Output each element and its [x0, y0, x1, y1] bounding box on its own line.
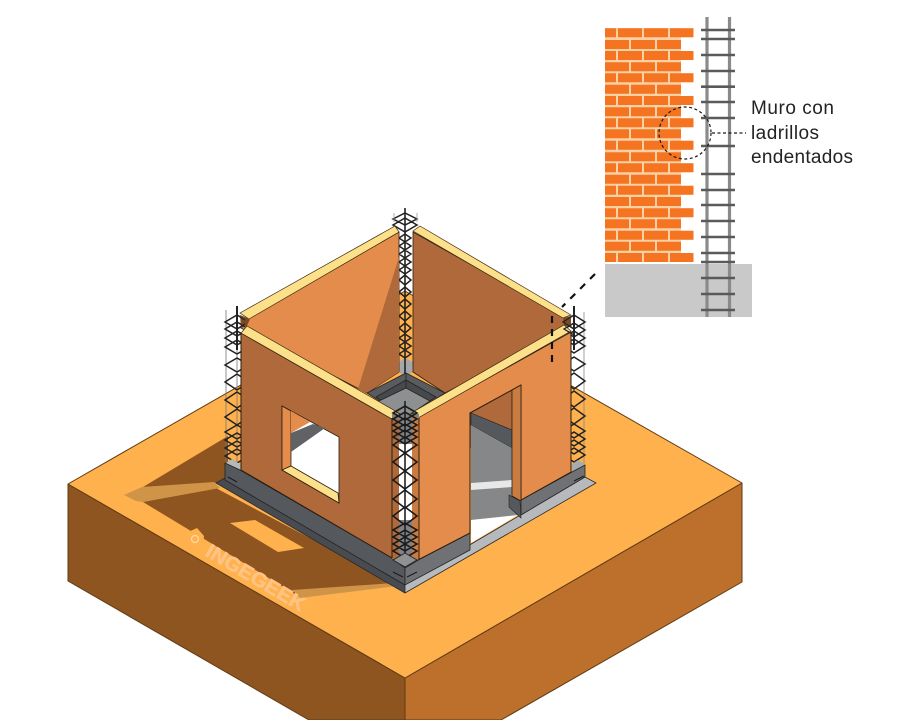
left column cap: [226, 459, 243, 471]
door opening interior: [470, 388, 518, 543]
rebar column: right: [563, 306, 585, 472]
ground top face: [68, 291, 742, 678]
gap white center: [392, 444, 419, 520]
door back wall: [470, 388, 514, 448]
window left reveal: [282, 406, 291, 470]
rebar overlay at top corners: [237, 315, 574, 335]
ground right face: [405, 483, 742, 720]
gap grey bottom: [392, 520, 419, 567]
foundation marks: [228, 476, 584, 577]
shadow lower: [143, 487, 396, 594]
callout leader dashed: [552, 274, 595, 362]
wall top: back right: [413, 226, 571, 318]
back column cap: [399, 358, 413, 376]
watermark icon: [186, 528, 204, 549]
rebar column: back: [393, 208, 417, 376]
rebar column: left: [225, 306, 249, 471]
ground left face: [68, 484, 405, 720]
left return: [392, 419, 399, 559]
foundation: front left: [225, 463, 405, 585]
window frame: [282, 406, 339, 503]
interior foundation and floor: [367, 373, 445, 418]
door light stripe: [471, 480, 512, 490]
detail panel: brick wall with rebar: [605, 17, 853, 317]
shadow upper: [143, 436, 228, 487]
detail leader line: [712, 132, 746, 134]
sandy light stripe upper: [124, 482, 220, 502]
right column cap: [572, 460, 585, 472]
watermark icon ring: [192, 536, 198, 542]
watermark: [186, 528, 310, 616]
foundation: right of door: [521, 465, 585, 515]
wall: back left interior: [241, 232, 399, 393]
wall: front left exterior: [241, 333, 392, 558]
wall top: front left: [241, 326, 397, 419]
detail label: Muro con: [751, 98, 834, 119]
interior floor: [377, 388, 430, 417]
interior shadow on wall: [358, 257, 399, 393]
right return: [412, 418, 419, 559]
door jamb: [512, 385, 521, 501]
rebar column: front: [393, 401, 417, 567]
front column gap: [392, 414, 419, 567]
detail circle: [659, 107, 711, 159]
window sill: [282, 466, 339, 503]
interior beam inner band: [376, 380, 436, 416]
corner joint: left: [240, 315, 250, 328]
door jamb foot: [509, 495, 521, 518]
door dark beam: [471, 413, 512, 448]
detail label: [751, 98, 853, 168]
window beam: [291, 424, 325, 452]
concrete footing: [605, 264, 752, 317]
foundation: front right near corner: [405, 532, 470, 585]
window interior wall: [291, 411, 310, 433]
wall top: front right: [413, 325, 571, 418]
slab right side: [405, 477, 596, 593]
front column cap: [393, 553, 417, 567]
corner joint: right: [563, 316, 571, 327]
window light patch: [230, 520, 304, 552]
door floor: [471, 425, 518, 520]
wall: front right exterior: [418, 332, 571, 560]
wall: back right interior: [413, 232, 566, 393]
watermark text: INGEGEEK: [201, 540, 310, 616]
ground block: [68, 291, 742, 720]
gap grey top: [392, 414, 419, 444]
detail label: endentados: [751, 147, 853, 168]
slab left side: [216, 478, 405, 593]
door threshold light: [471, 515, 518, 543]
ladder rebar: [701, 17, 735, 317]
window opening: [282, 406, 339, 503]
foundation slab: [216, 477, 596, 593]
sandy light stripe lower: [292, 583, 397, 598]
wall top: back left: [240, 226, 399, 319]
interior foundation beam: [367, 373, 445, 418]
detail label: ladrillos: [751, 123, 819, 144]
cast shadow: [124, 436, 397, 598]
brick wall: [605, 28, 694, 262]
